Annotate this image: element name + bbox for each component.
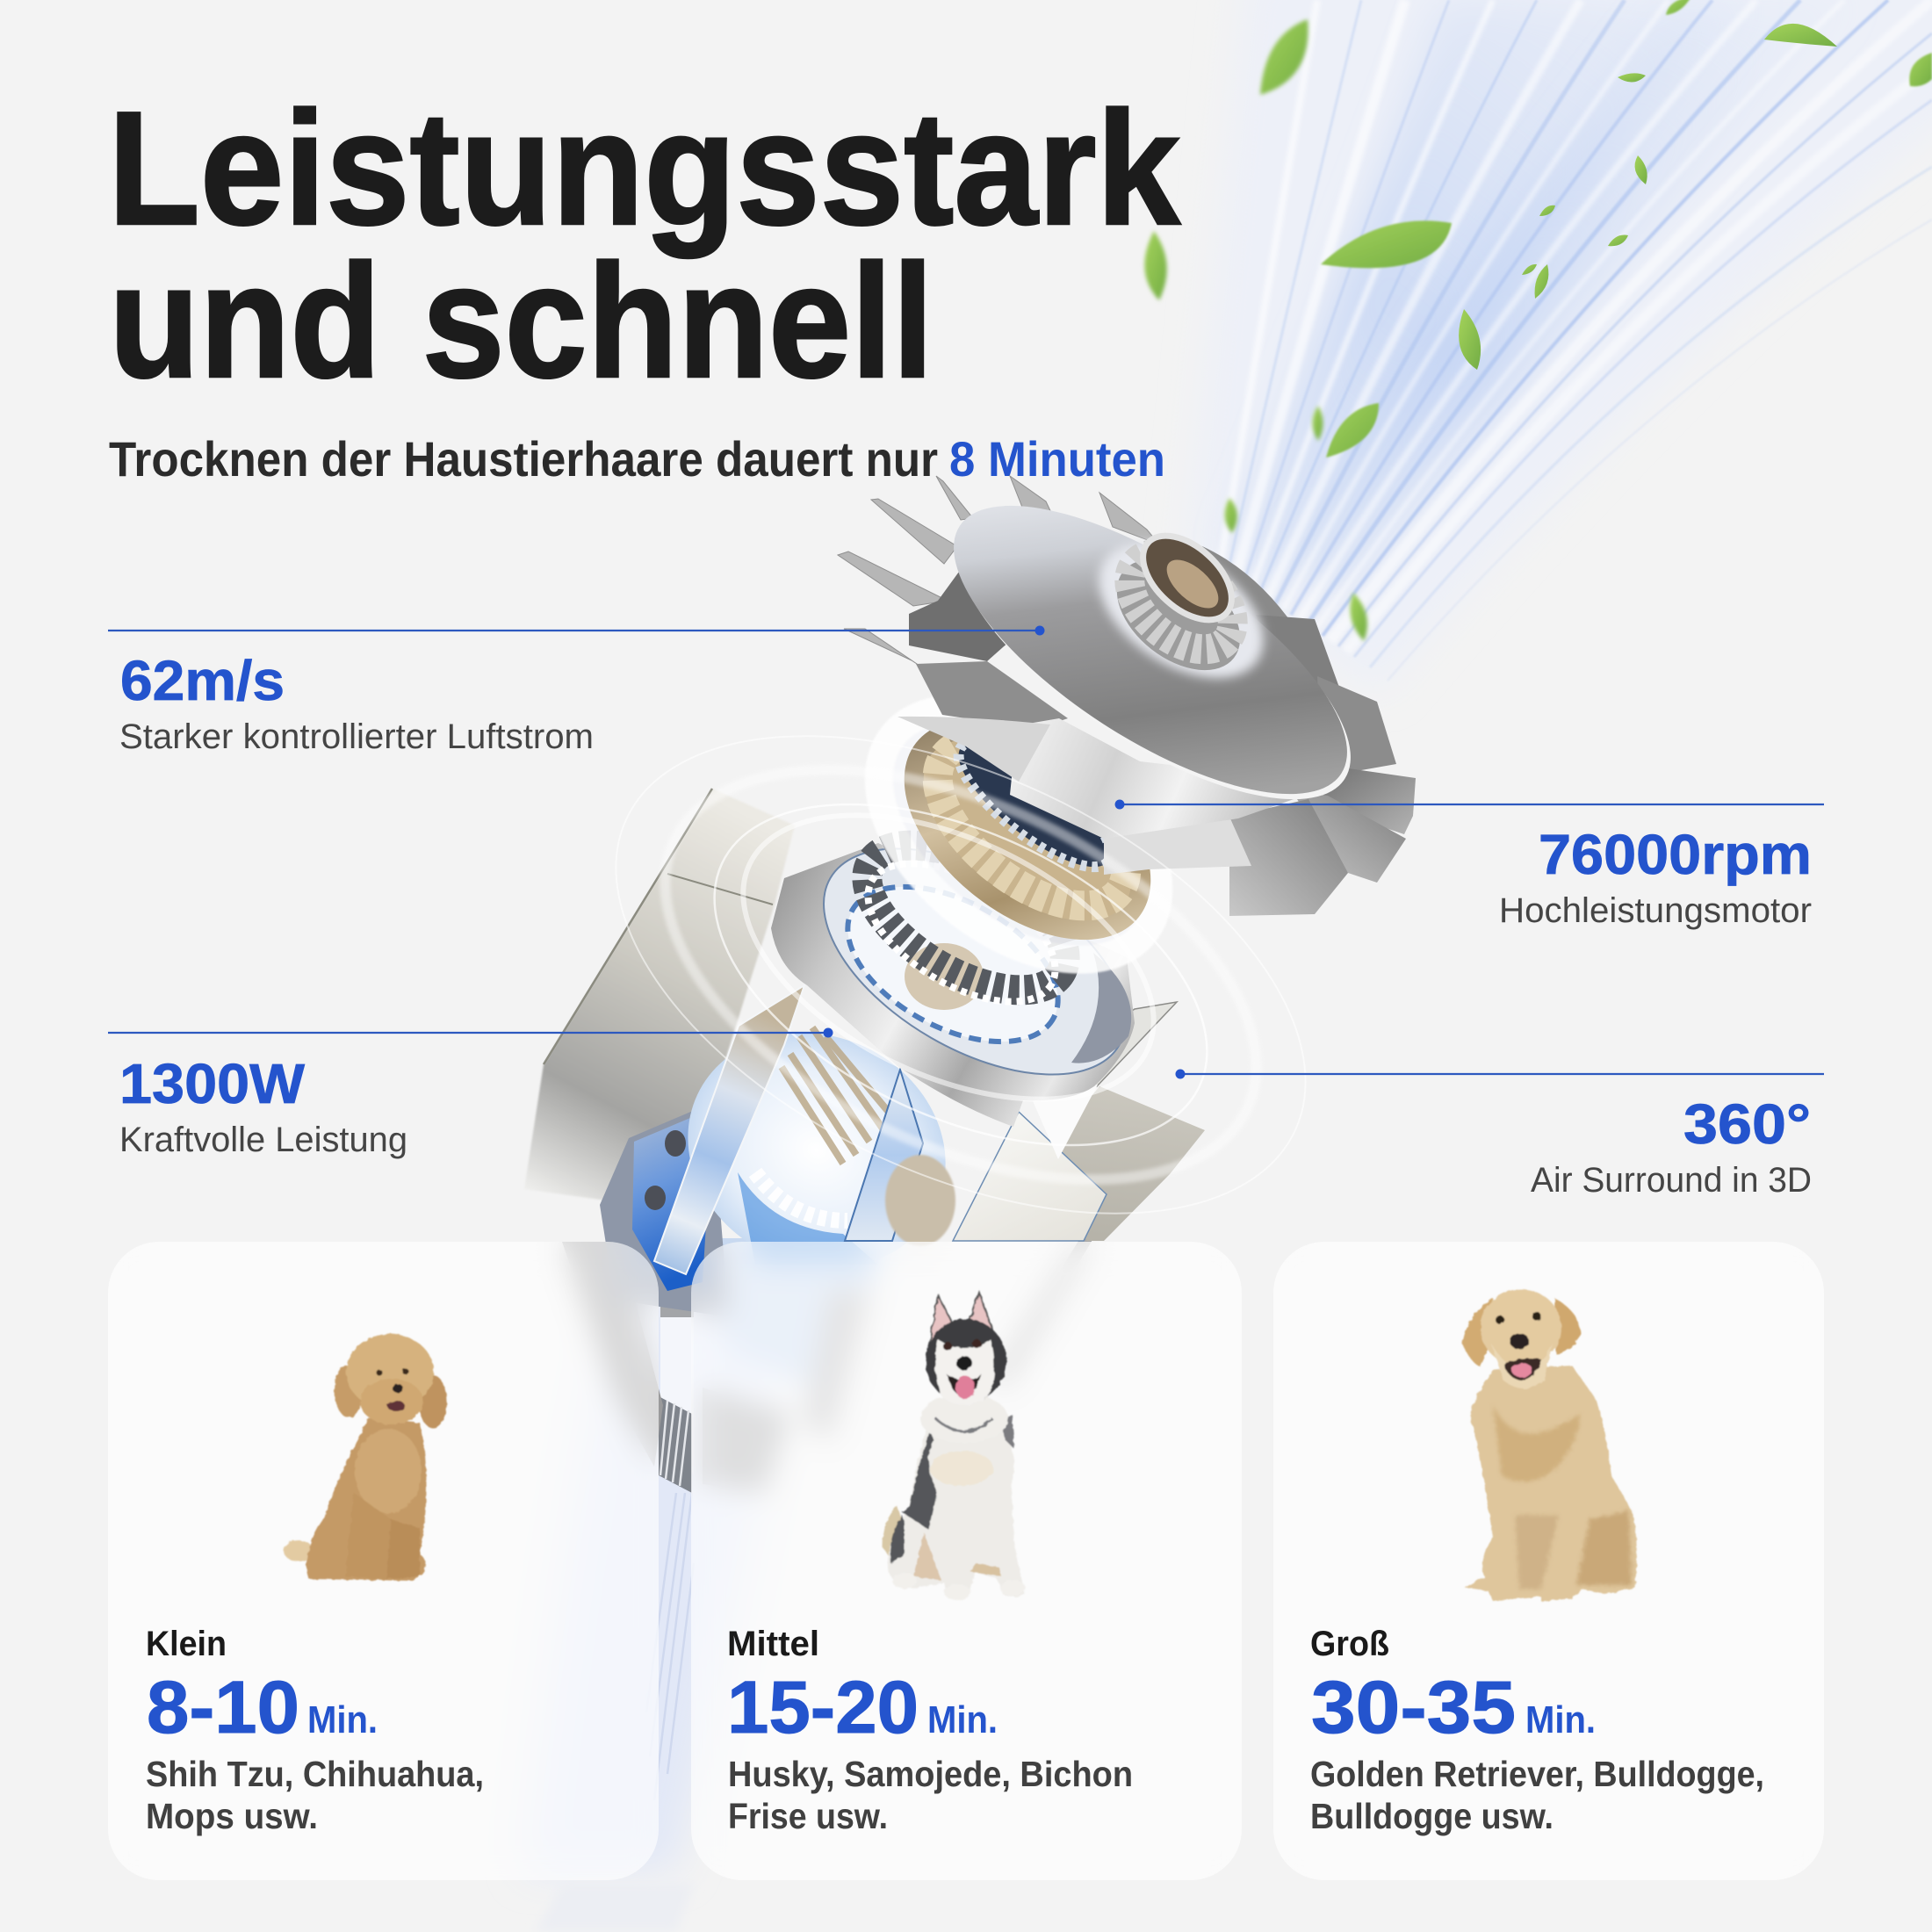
fin inner edge xyxy=(667,874,773,905)
blue hub ring xyxy=(632,1108,713,1291)
impeller disc edge xyxy=(915,458,1393,853)
icon: poodle xyxy=(284,1334,447,1581)
dark gear rows xyxy=(844,816,1088,1020)
bearing bore xyxy=(1158,551,1227,616)
value: 8-10 Min.: Min. xyxy=(307,1698,378,1741)
gold gear ring xyxy=(877,690,1178,970)
subtitle: 8 Minuten xyxy=(949,431,1165,487)
airflow behind the motor xyxy=(1186,0,1932,694)
breeds list: Husky, Samojede, Bichon xyxy=(728,1754,1133,1794)
callout: 76000rpm: Hochleistungsmotor xyxy=(1499,891,1812,930)
motor body with fins xyxy=(524,789,1205,1317)
bearing rim xyxy=(1128,520,1247,636)
blue edged gear xyxy=(822,854,1084,1074)
upper right blade edge xyxy=(1202,546,1295,632)
value: 15-20 Min. xyxy=(727,1666,998,1748)
callout: 360 degrees xyxy=(1175,1070,1824,1200)
label: Mittel: Mittel xyxy=(727,1625,819,1663)
panel: large dogs xyxy=(1273,1242,1824,1880)
breeds list xyxy=(146,1754,484,1836)
callout: 76000rpm xyxy=(1115,799,1824,930)
breeds list: Frise usw. xyxy=(728,1796,888,1836)
callout: 360 degrees: Air Surround in 3D xyxy=(1531,1161,1812,1200)
left large fin xyxy=(524,789,795,1203)
label: Klein: Klein xyxy=(146,1625,227,1663)
dark blue teeth xyxy=(941,722,1128,887)
value: 30-35 Min. xyxy=(1311,1666,1596,1748)
gold teeth xyxy=(909,710,1155,938)
collar opening xyxy=(786,802,1164,1121)
label: Gross: Groß xyxy=(1310,1625,1389,1663)
breeds list: Golden Retriever, Bulldogge, xyxy=(1310,1754,1764,1794)
dark left blade root xyxy=(909,562,1010,661)
grey inner wall xyxy=(1071,953,1131,1063)
icon: golden retriever xyxy=(1462,1289,1637,1602)
value: 15-20 Min.: 15-20 xyxy=(727,1666,919,1748)
callout: 62m/s xyxy=(108,625,1045,756)
breeds list xyxy=(1310,1754,1764,1836)
panel: medium dogs xyxy=(691,1242,1242,1880)
value: 15-20 Min.: Min. xyxy=(927,1698,998,1741)
hub holes xyxy=(645,1130,686,1210)
left fin edge xyxy=(544,789,712,1064)
icon: husky xyxy=(883,1293,1025,1600)
hub halo xyxy=(1075,515,1287,706)
translucent white ring xyxy=(833,659,1205,1010)
impeller disc xyxy=(912,452,1389,847)
white fin neck xyxy=(1027,1085,1098,1159)
small rear fin xyxy=(1054,1002,1177,1086)
central white blades xyxy=(961,718,1319,839)
title xyxy=(108,77,1181,411)
callout: 76000rpm: 76000rpm xyxy=(1539,823,1812,886)
floating green leaves xyxy=(1144,0,1932,641)
curved top-left blade xyxy=(898,717,1050,782)
breeds list: Bulldogge usw. xyxy=(1310,1796,1554,1836)
title: und schnell xyxy=(109,230,934,411)
callout: 1300W xyxy=(108,1027,833,1159)
right front fin xyxy=(953,1112,1107,1241)
lower white blade xyxy=(1104,812,1251,875)
impeller and gold ring xyxy=(833,452,1416,1010)
bright blue gear edge xyxy=(738,1172,878,1265)
bearing rollers xyxy=(1112,535,1251,668)
right back blades xyxy=(1256,615,1342,711)
thin left back blades xyxy=(838,476,1159,667)
value: 30-35 Min.: Min. xyxy=(1525,1698,1596,1741)
subtitle: Trocknen der Haustierhaare dauert nur xyxy=(109,431,938,487)
breeds list: Mops usw. xyxy=(146,1796,318,1836)
grey left blade xyxy=(916,661,1068,729)
bearing rollers base xyxy=(1096,537,1261,693)
light gear teeth xyxy=(755,1172,847,1221)
callout: 1300W: Kraftvolle Leistung xyxy=(119,1121,407,1159)
callout: 1300W: 1300W xyxy=(119,1052,306,1115)
breeds list: Shih Tzu, Chihuahua, xyxy=(146,1754,484,1794)
callout: 62m/s: Starker kontrollierter Luftstrom xyxy=(119,717,594,756)
swirling air rings xyxy=(542,638,1380,1311)
blue hub base xyxy=(600,1103,729,1317)
value: 30-35 Min.: 30-35 xyxy=(1311,1666,1516,1748)
value: 8-10 Min. xyxy=(147,1666,378,1748)
value: 8-10 Min.: 8-10 xyxy=(147,1666,299,1748)
glowing gear section xyxy=(649,991,984,1309)
title: Leistungsstark xyxy=(108,77,1181,258)
breeds list xyxy=(728,1754,1133,1836)
centre right panel xyxy=(845,1070,923,1241)
right gear xyxy=(885,1155,955,1246)
centre left panel xyxy=(654,985,804,1274)
airflow below the motor xyxy=(527,1238,1093,1932)
callout: 62m/s: 62m/s xyxy=(120,649,285,712)
panel: small dogs xyxy=(108,1242,659,1880)
beige inner core xyxy=(905,943,984,1010)
beige gear stripes xyxy=(782,1027,891,1164)
light gear rows xyxy=(846,835,1078,1030)
right rear fin xyxy=(1054,1086,1205,1241)
callout: 360 degrees: 360° xyxy=(1683,1092,1811,1156)
silver collar xyxy=(771,843,1135,1127)
